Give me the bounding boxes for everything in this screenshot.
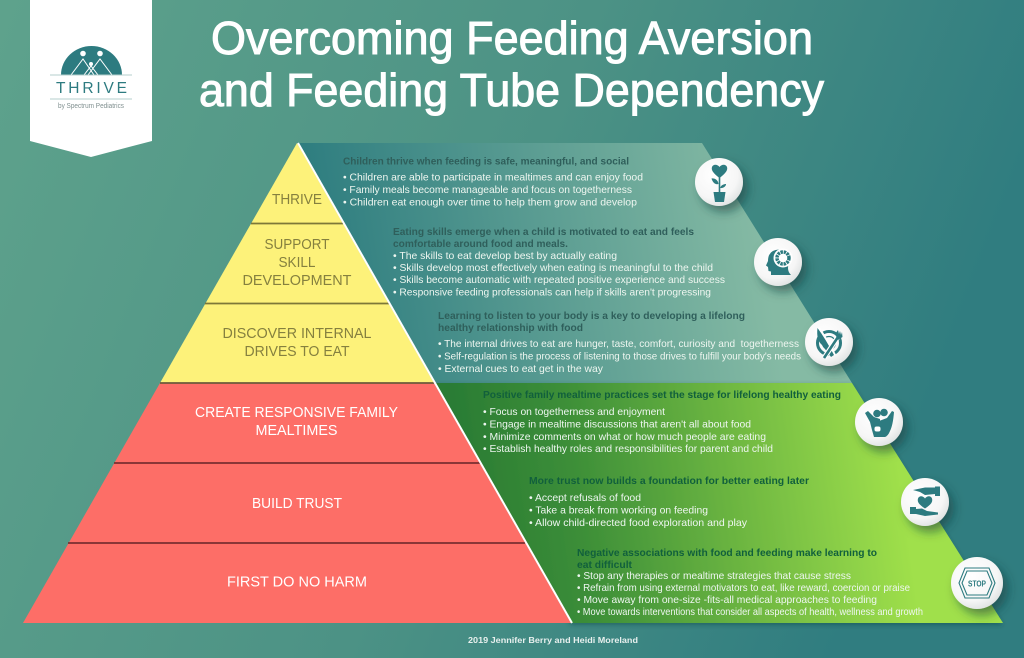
panel: upper right band bbox=[299, 143, 852, 383]
heading: internal drives bbox=[438, 310, 745, 334]
heading: family mealtimes: Positive family mealtime practices set the stage for lifelong healthy eating bbox=[483, 389, 841, 401]
heading: thrive: Children thrive when feeding is safe, meaningful, and social bbox=[343, 156, 629, 168]
bullets: internal drives: • Self-regulation is the process of listening to those drives to fulfill your body's needs bbox=[438, 352, 801, 362]
bullets: build trust: • Take a break from working on feeding bbox=[529, 506, 708, 516]
tier label: support skill development: DEVELOPMENT bbox=[242, 272, 352, 289]
heading: no harm: Negative associations with food and feeding make learning to bbox=[577, 547, 877, 559]
panel: lower right band bbox=[434, 383, 1003, 623]
tier label: thrive: THRIVE bbox=[272, 191, 322, 208]
title: and Feeding Tube Dependency bbox=[199, 64, 824, 116]
bullets: no harm bbox=[577, 571, 923, 618]
bullets: thrive: • Children are able to participate in mealtimes and can enjoy food bbox=[343, 172, 643, 184]
bullets: thrive: • Children eat enough over time to help them grow and develop bbox=[343, 198, 637, 208]
text block: thrive bbox=[343, 156, 643, 208]
footer credit: 2019 Jennifer Berry and Heidi Moreland bbox=[468, 635, 638, 645]
bullets: thrive: • Family meals become manageable and focus on togetherness bbox=[343, 185, 632, 196]
bullets: build trust: • Allow child-directed food exploration and play bbox=[529, 518, 748, 529]
logo wordmark: THRIVE bbox=[56, 80, 127, 97]
pyramid bbox=[23, 143, 572, 623]
bullets: family mealtimes: • Focus on togetherness and enjoyment bbox=[483, 407, 665, 418]
bullets: internal drives: • The internal drives to eat are hunger, taste, comfort, curiosity and togetherness bbox=[438, 339, 799, 350]
bullets: family mealtimes: • Engage in mealtime discussions that aren't all about food bbox=[483, 420, 751, 430]
tier label: first do no harm: FIRST DO NO HARM bbox=[227, 574, 367, 590]
heading: skills: comfortable around food and meals. bbox=[393, 238, 568, 250]
text block: family mealtimes bbox=[483, 389, 841, 455]
heading: build trust: More trust now builds a foundation for better eating later bbox=[529, 475, 809, 487]
title: Overcoming Feeding Aversion bbox=[211, 12, 813, 64]
icon: head with gear bbox=[754, 238, 802, 286]
tier label: create responsive family mealtimes: CREATE RESPONSIVE FAMILY bbox=[195, 404, 398, 421]
bullets: internal drives: • External cues to eat get in the way bbox=[438, 364, 604, 375]
bullets: no harm: • Stop any therapies or mealtime strategies that cause stress bbox=[577, 571, 851, 582]
icon: hands with heart bbox=[901, 478, 949, 526]
tier label: support skill development: SKILL bbox=[278, 254, 316, 271]
heading: skills: Eating skills emerge when a child is motivated to eat and feels bbox=[393, 226, 694, 238]
bullets: internal drives bbox=[438, 339, 801, 375]
logo dome icon bbox=[61, 46, 122, 75]
bullets: skills: • Responsive feeding professionals can help if skills aren't progressing bbox=[393, 288, 711, 298]
pyramid: red tiers bbox=[23, 383, 571, 623]
heading: skills bbox=[393, 226, 694, 250]
heading: no harm: eat difficult bbox=[577, 559, 632, 571]
logo banner bbox=[30, 0, 152, 157]
heading: no harm bbox=[577, 547, 877, 571]
bullets: build trust bbox=[529, 493, 748, 529]
heading: internal drives: Learning to listen to your body is a key to developing a lifelong bbox=[438, 310, 745, 322]
bullets: thrive bbox=[343, 172, 643, 208]
icon: heart plant bbox=[695, 158, 743, 206]
bullets: skills bbox=[393, 251, 725, 298]
icon: plate knife and fork bbox=[805, 318, 853, 366]
bullets: skills: • Skills develop most effectively when eating is meaningful to the child bbox=[393, 263, 713, 274]
logo tagline: by Spectrum Pediatrics bbox=[58, 103, 124, 110]
bullets: skills: • Skills become automatic with repeated positive experience and success bbox=[393, 275, 725, 286]
title bbox=[199, 12, 824, 116]
bullets: no harm: • Refrain from using external motivators to eat, like reward, coercion or praise bbox=[577, 583, 910, 594]
tier label: create responsive family mealtimes bbox=[195, 404, 398, 439]
tier label: discover internal drives: DRIVES TO EAT bbox=[244, 343, 350, 360]
bullets: no harm: • Move away from one-size -fits-all medical approaches to feeding bbox=[577, 595, 877, 606]
icon: stop sign: STOP bbox=[968, 580, 987, 588]
tier label: create responsive family mealtimes: MEALTIMES bbox=[256, 422, 338, 439]
text block: first do no harm bbox=[577, 547, 923, 618]
tier label: discover internal drives: DISCOVER INTERNAL bbox=[222, 325, 372, 342]
tier label: discover internal drives bbox=[222, 325, 372, 360]
pyramid dividers bbox=[68, 224, 525, 543]
bullets: no harm: • Move towards interventions that consider all aspects of health, wellness and growth bbox=[577, 607, 923, 618]
bullets: skills: • The skills to eat develop best by actually eating bbox=[393, 251, 617, 262]
bullets: family mealtimes: • Establish healthy roles and responsibilities for parent and child bbox=[483, 444, 773, 455]
bullets: family mealtimes bbox=[483, 407, 773, 455]
bullets: family mealtimes: • Minimize comments on what or how much people are eating bbox=[483, 432, 766, 443]
text block: internal drives bbox=[438, 310, 801, 375]
text block: support skill development bbox=[393, 226, 725, 298]
bullets: build trust: • Accept refusals of food bbox=[529, 493, 641, 504]
text block: build trust bbox=[529, 475, 809, 529]
pyramid: yellow tiers bbox=[160, 143, 434, 383]
heading: internal drives: healthy relationship with food bbox=[438, 322, 583, 334]
tier label: support skill development bbox=[242, 236, 352, 289]
tier label: build trust: BUILD TRUST bbox=[252, 495, 342, 512]
tier label: support skill development: SUPPORT bbox=[264, 236, 330, 253]
icon: family hug bbox=[855, 398, 903, 446]
pyramid right edge bbox=[298, 143, 572, 623]
icon: stop sign bbox=[951, 557, 1003, 609]
